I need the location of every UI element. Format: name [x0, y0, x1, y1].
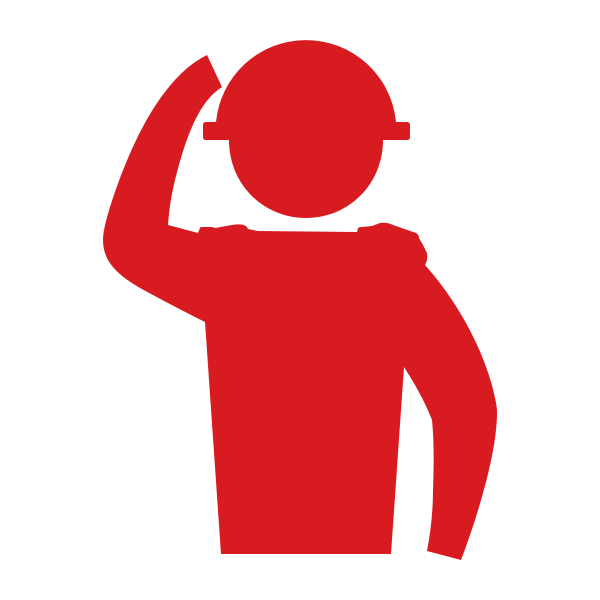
- hard hat and head: [203, 40, 410, 218]
- body with raised arm: [103, 55, 497, 560]
